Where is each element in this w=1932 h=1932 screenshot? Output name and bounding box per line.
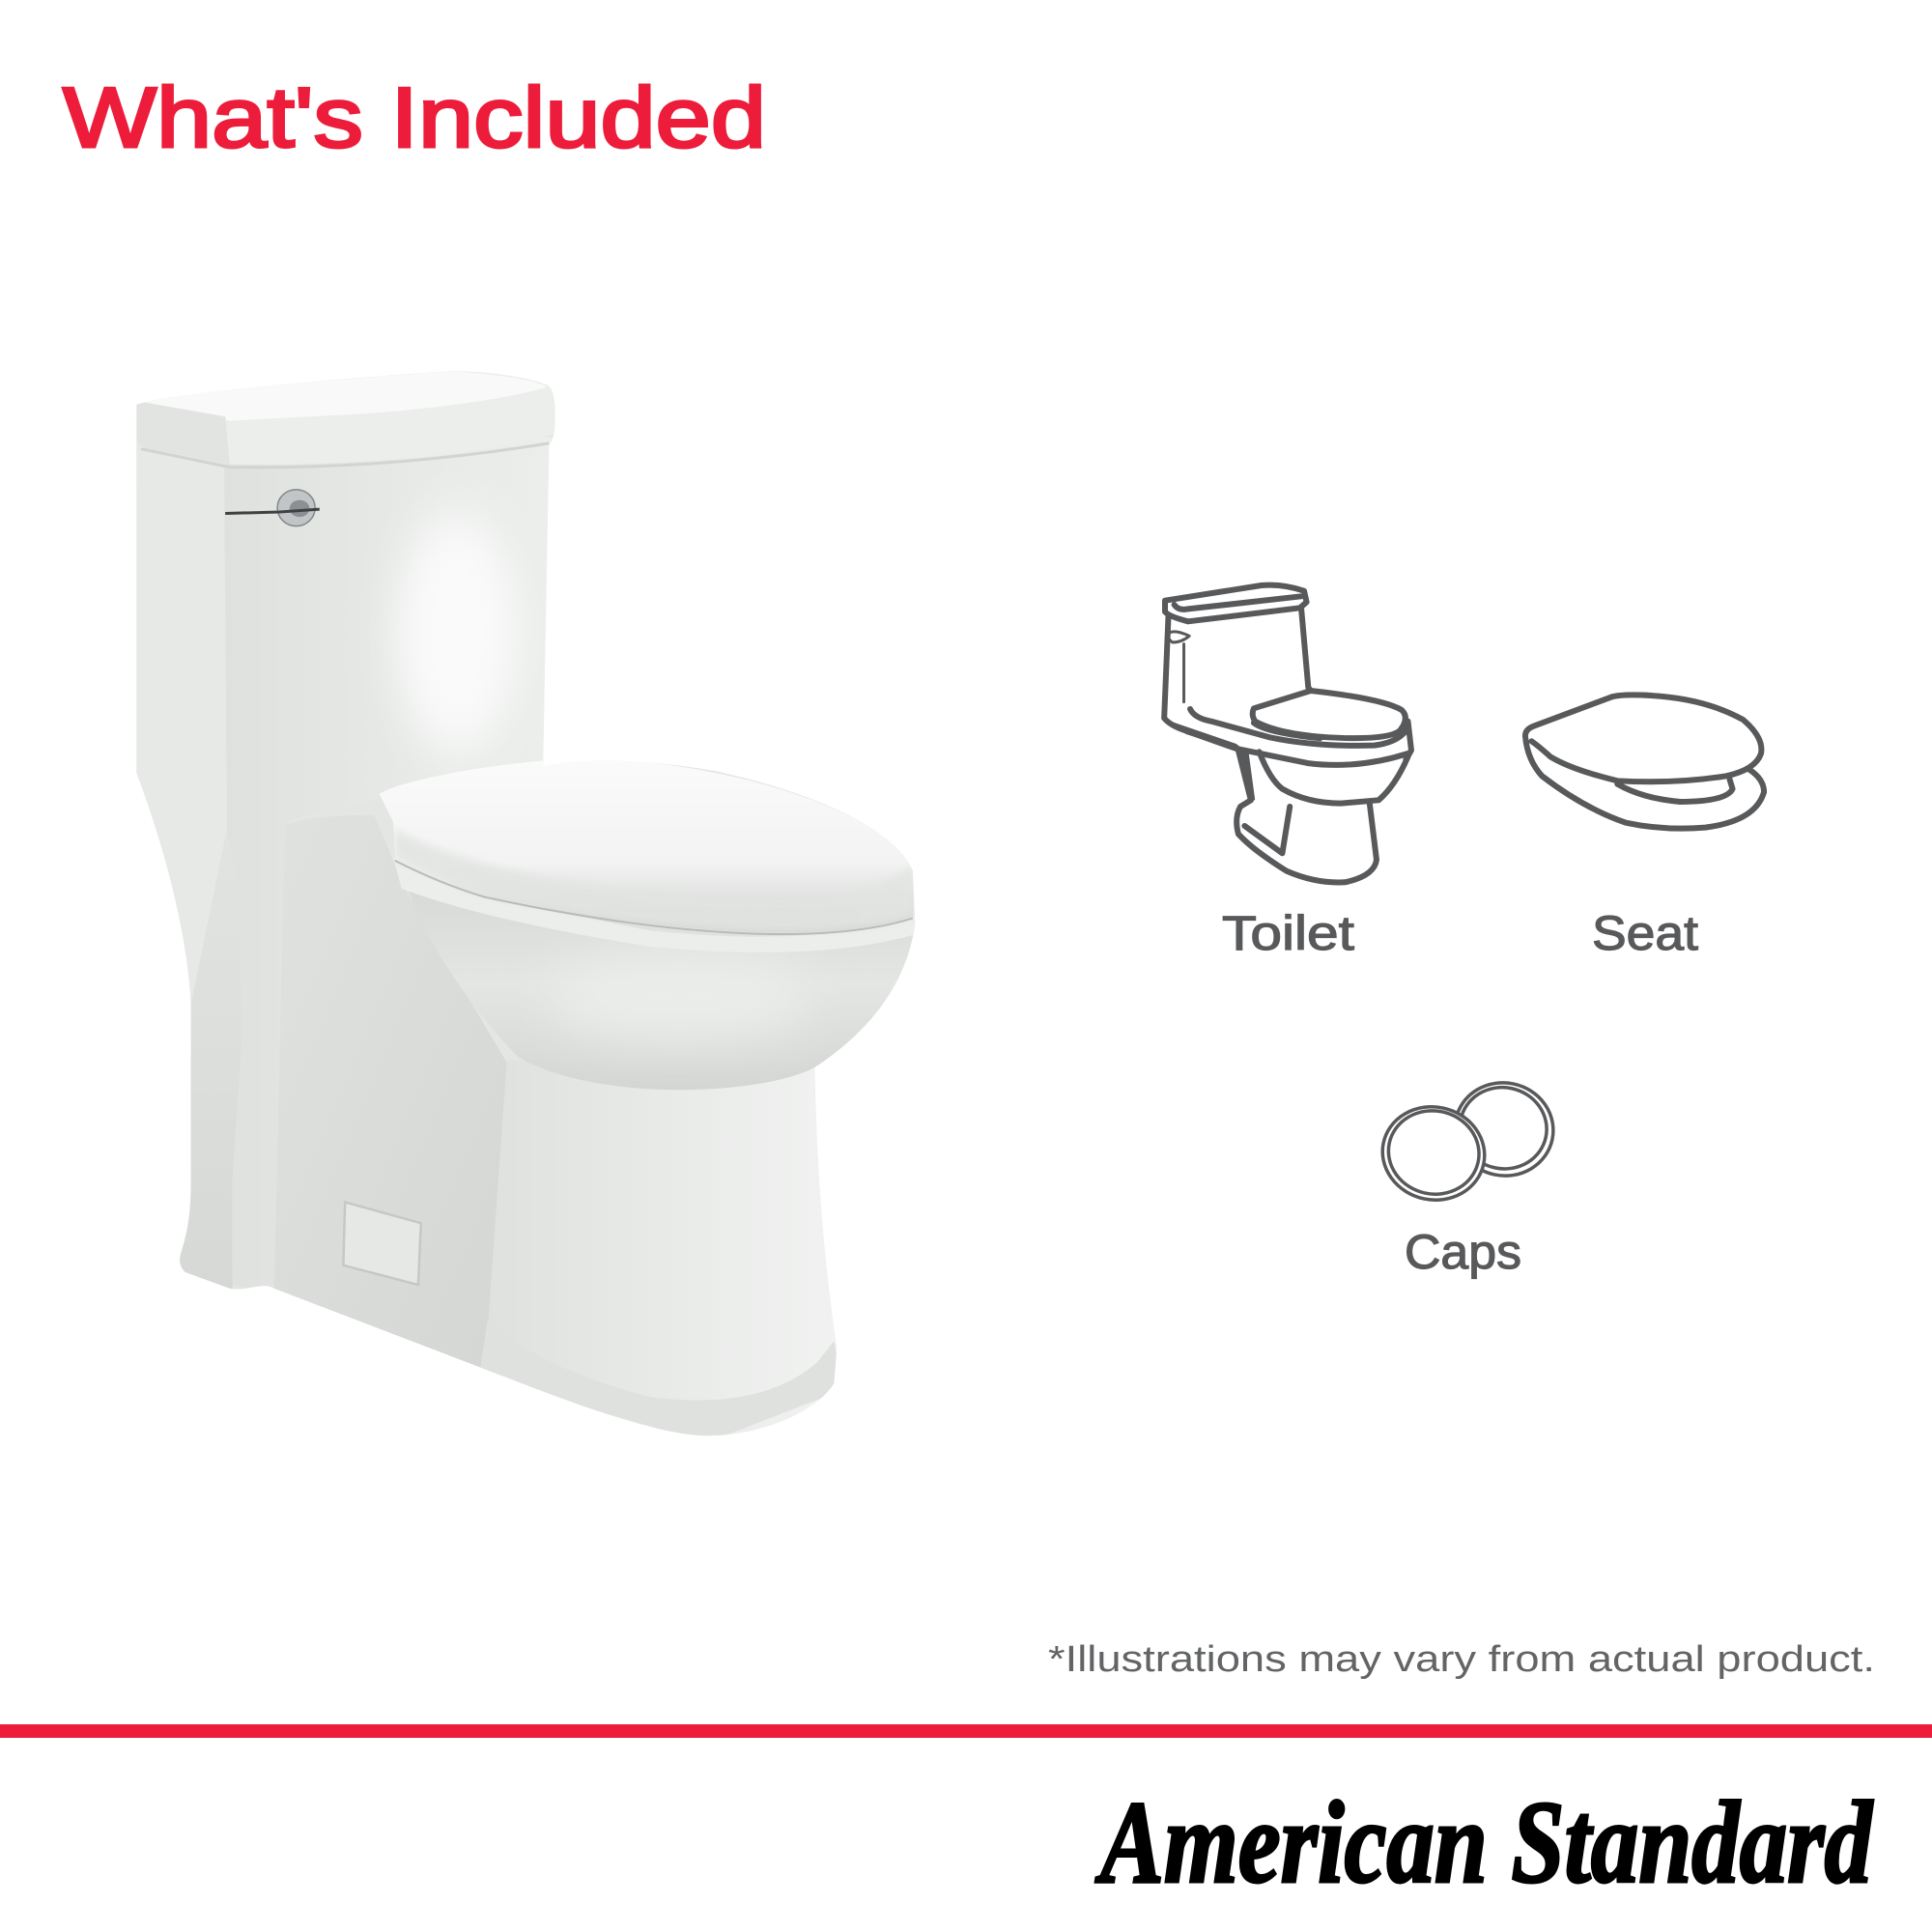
seat bottom line xyxy=(395,861,913,934)
icon bowl xyxy=(1260,752,1408,804)
silhouette xyxy=(136,371,915,1435)
seat cover xyxy=(1525,695,1764,829)
icon rim xyxy=(1190,709,1411,760)
icon lid xyxy=(1165,585,1307,621)
lid shadow line xyxy=(141,443,549,468)
seat front edge shading xyxy=(395,829,913,932)
back cap xyxy=(1446,1073,1562,1185)
flush handle xyxy=(225,490,320,526)
icon tank xyxy=(1164,607,1408,765)
cleanout panel xyxy=(343,1202,421,1285)
footnote: *Illustrations may vary from actual product. xyxy=(1048,1639,1875,1680)
icon seat lid xyxy=(1253,691,1406,738)
red divider xyxy=(0,1724,1932,1738)
seat lid xyxy=(380,758,913,932)
bowl xyxy=(405,878,918,1090)
title: What's Included xyxy=(63,70,766,165)
icon handle xyxy=(1168,632,1189,702)
toilet label: Toilet xyxy=(1222,906,1354,960)
icon shading xyxy=(1166,720,1255,800)
icon pedestal xyxy=(1236,751,1377,882)
caps icon xyxy=(1374,1073,1562,1209)
tank left side column xyxy=(180,1005,240,1289)
seat rim xyxy=(393,857,916,952)
lid left shade xyxy=(137,402,230,464)
seat icon xyxy=(1525,695,1764,829)
caps label: Caps xyxy=(1405,1225,1521,1279)
shaded surfaces xyxy=(129,366,918,1442)
front cap xyxy=(1374,1097,1493,1209)
product photo: one-piece toilet xyxy=(129,366,918,1442)
toilet icon xyxy=(1164,585,1411,882)
tank lid top xyxy=(136,371,547,421)
lower body xyxy=(280,890,506,1368)
tank lid front band xyxy=(230,456,334,465)
seat label: Seat xyxy=(1592,906,1698,960)
pedestal foot xyxy=(479,1320,842,1442)
tank highlight xyxy=(396,514,518,752)
seat ring xyxy=(1617,780,1733,802)
tank front xyxy=(248,1287,255,1289)
pedestal xyxy=(485,1061,839,1439)
